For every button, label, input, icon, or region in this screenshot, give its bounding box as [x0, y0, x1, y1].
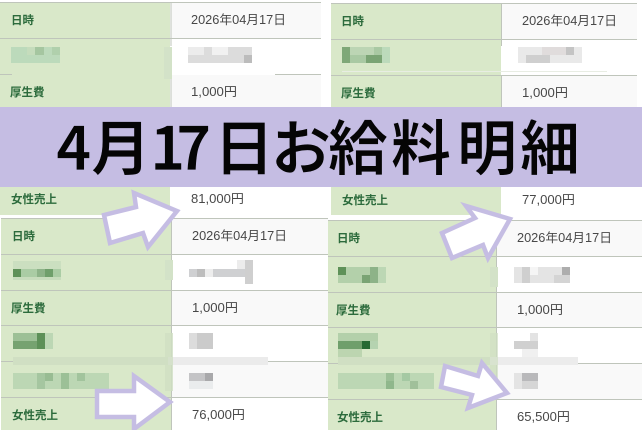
value: date: 2026年04月17日	[191, 13, 286, 27]
value: date: 2026年04月17日	[192, 229, 287, 243]
label: welfare fee: 厚生費	[11, 301, 46, 315]
mosaic: name label	[342, 47, 390, 63]
mosaic: name value	[189, 260, 253, 284]
erased band	[13, 333, 268, 391]
value: female sales: 76,000円	[192, 408, 245, 422]
label: welfare fee: 厚生費	[10, 85, 44, 99]
value: female sales: 77,000円	[522, 193, 575, 207]
value: date: 2026年04月17日	[522, 14, 617, 28]
mosaic: row 5 label	[13, 373, 109, 389]
title banner	[0, 101, 642, 188]
label: female sales: 女性売上	[11, 192, 57, 206]
mosaic: row 5 label	[338, 373, 434, 389]
value: female sales: 65,500円	[517, 410, 570, 424]
label: female sales: 女性売上	[12, 408, 58, 422]
mosaic: row 4 value	[514, 333, 538, 357]
value: welfare fee: 1,000円	[522, 86, 568, 100]
mosaic: row 5 value	[189, 373, 213, 389]
arrow: top-right	[442, 206, 510, 258]
mosaic: name label	[338, 267, 498, 287]
arrow: top-left	[104, 193, 177, 247]
mosaic: row 4 label	[338, 333, 378, 357]
label: female sales: 女性売上	[337, 410, 383, 424]
mosaic: name value	[188, 47, 252, 63]
label: date: 日時	[337, 231, 360, 245]
mosaic: row 4 label	[13, 333, 53, 349]
label: date: 日時	[11, 13, 34, 27]
mosaic: name label	[13, 260, 173, 280]
value: welfare fee: 1,000円	[517, 303, 563, 317]
panel: top-left payslip	[0, 2, 321, 215]
value: welfare fee: 1,000円	[192, 301, 238, 315]
erased band	[338, 333, 578, 391]
arrow: bottom-right	[441, 363, 507, 408]
label: welfare fee: 厚生費	[341, 86, 376, 100]
value: date: 2026年04月17日	[517, 231, 612, 245]
mosaic: name value	[514, 267, 570, 283]
mosaic: row 5 value	[514, 373, 538, 389]
label: date: 日時	[341, 14, 364, 28]
title: 4月17日お給料明細	[56, 101, 580, 188]
panel: top-right payslip	[331, 3, 637, 215]
mosaic: row 4 value	[189, 333, 213, 349]
label: date: 日時	[12, 229, 35, 243]
label: welfare fee: 厚生費	[336, 303, 370, 317]
mosaic: name label	[11, 47, 172, 79]
panel: bottom-left payslip	[1, 218, 328, 430]
value: female sales: 81,000円	[191, 192, 244, 206]
mosaic: name value	[518, 47, 582, 63]
label: female sales: 女性売上	[342, 193, 388, 207]
value: welfare fee: 1,000円	[191, 85, 237, 99]
panel: bottom-right payslip	[328, 220, 642, 430]
arrow: bottom-left	[97, 376, 170, 429]
